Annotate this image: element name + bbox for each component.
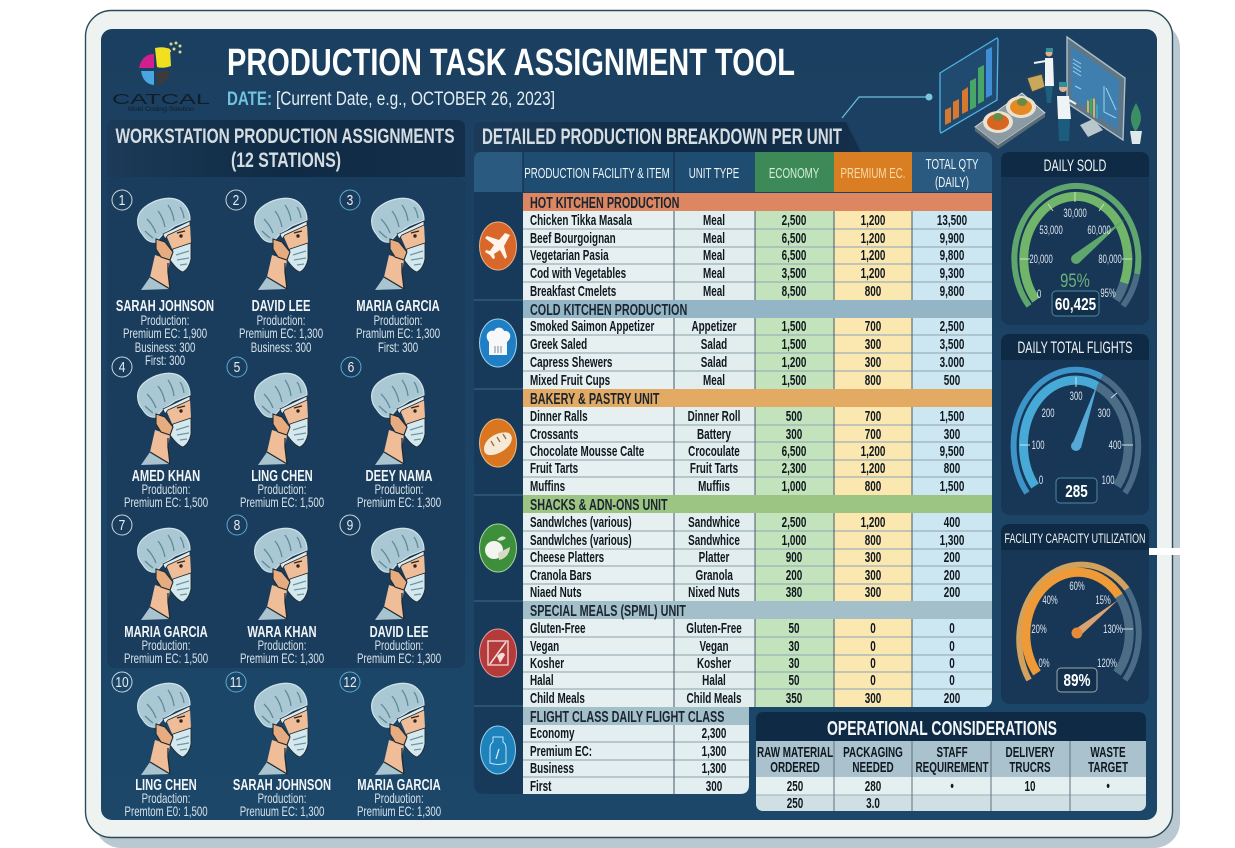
section: snacks: 300 bbox=[865, 549, 881, 566]
section: cold kitchen: Mixed Fruit Cups bbox=[530, 372, 610, 389]
section: hot kitchen: Meal bbox=[703, 230, 725, 247]
gauge: daily sold: 60,425 bbox=[1055, 295, 1096, 315]
station 1: SARAH JOHNSON bbox=[116, 296, 214, 314]
station 7 bbox=[112, 515, 209, 666]
panel: operational considerations: 250 bbox=[787, 795, 803, 812]
section: hot kitchen: 6,500 bbox=[782, 230, 806, 247]
station 3: Production: bbox=[374, 313, 422, 328]
station 1 bbox=[112, 190, 214, 368]
station 8: 8 bbox=[234, 517, 240, 533]
section: hot kitchen: HOT KITCHEN PRODUCTION bbox=[530, 194, 679, 212]
section: hot kitchen: Beef Bourgoignan bbox=[530, 230, 616, 247]
section: special meals: Halal bbox=[702, 672, 726, 689]
station 8: Production: bbox=[258, 638, 306, 653]
section: cold kitchen: 1,200 bbox=[782, 354, 806, 371]
station 4: Production: bbox=[142, 482, 190, 497]
section: cold kitchen: 2,500 bbox=[940, 318, 964, 335]
station 3 bbox=[340, 190, 441, 355]
gauge: daily sold bbox=[1001, 152, 1149, 325]
section: hot kitchen: Cod with Vegetables bbox=[530, 265, 626, 282]
section: snacks: 800 bbox=[865, 532, 881, 549]
section: special meals: 0 bbox=[949, 620, 955, 637]
header illustration bbox=[842, 37, 1142, 149]
section: snacks: Granola bbox=[696, 567, 734, 584]
section: bakery: 1,000 bbox=[782, 478, 806, 495]
station 6: DEEY NAMA bbox=[366, 466, 433, 484]
station 4 bbox=[112, 357, 209, 510]
panel: operational considerations: WASTE bbox=[1090, 744, 1126, 761]
table header row bbox=[474, 152, 992, 192]
station 4: Premium EC: 1,500 bbox=[124, 495, 209, 510]
station 2: DAVID LEE bbox=[252, 296, 310, 314]
heading: workstation production assignments: WORKSTATION PRODUCTION ASSIGNMENTS bbox=[116, 124, 454, 148]
section: bakery: 700 bbox=[865, 408, 881, 425]
section: special meals: Vegan bbox=[530, 638, 559, 655]
panel: operational considerations: NEEDED bbox=[852, 759, 894, 776]
heading: workstation production assignments: (12 STATIONS) bbox=[231, 148, 341, 172]
panel: operational considerations: TRUCRS bbox=[1009, 759, 1051, 776]
gauge: daily total flights: 300 bbox=[1098, 407, 1111, 421]
gauge: daily sold: 95% bbox=[1060, 270, 1090, 291]
station 3: Pramlum EC: 1,300 bbox=[356, 326, 441, 341]
station 10: Prodaction: bbox=[142, 791, 190, 806]
station 5: Premium EC: 1,500 bbox=[240, 495, 325, 510]
gauge: facility capacity utilization: 89% bbox=[1064, 671, 1090, 691]
section: hot kitchen: Chicken Tikka Masala bbox=[530, 212, 633, 229]
section: special meals: 0 bbox=[949, 638, 955, 655]
icon: apple bbox=[480, 524, 516, 572]
station 2: Premium EC: 1,300 bbox=[239, 326, 324, 341]
section: snacks: 200 bbox=[944, 584, 960, 601]
station 12: MARIA GARCIA bbox=[357, 775, 441, 793]
section: snacks: 200 bbox=[944, 549, 960, 566]
panel: operational considerations: 280 bbox=[865, 778, 881, 795]
panel: operational considerations bbox=[756, 712, 1146, 812]
gauge: daily sold: 0 bbox=[1037, 288, 1042, 302]
section: cold kitchen: Appetizer bbox=[691, 318, 737, 335]
logo: CATCAL bbox=[112, 91, 210, 108]
station 9 bbox=[340, 515, 442, 666]
section: bakery: 9,500 bbox=[940, 443, 964, 460]
icon: bottle bbox=[480, 726, 516, 774]
section: bakery: 300 bbox=[786, 426, 802, 443]
section: bakery bbox=[523, 389, 992, 495]
section: bakery: Chocolate Mousse Calte bbox=[530, 443, 644, 460]
section: bakery: 800 bbox=[865, 478, 881, 495]
section: special meals: 30 bbox=[788, 638, 800, 655]
section: special meals: Child Meals bbox=[530, 690, 585, 707]
section: special meals: 350 bbox=[786, 690, 802, 707]
gauge: daily total flights bbox=[1001, 334, 1149, 515]
station 2 bbox=[226, 190, 324, 355]
gauge: facility capacity utilization: 120% bbox=[1097, 657, 1117, 671]
section: special meals: Halal bbox=[530, 672, 554, 689]
section: special meals: 50 bbox=[788, 672, 800, 689]
station 7: 7 bbox=[119, 517, 125, 533]
section: snacks: Sandwlches (various) bbox=[530, 514, 632, 531]
section: snacks bbox=[523, 495, 992, 601]
station 4: AMED KHAN bbox=[132, 466, 200, 484]
section: special meals: Gluten-Free bbox=[686, 620, 742, 637]
panel: operational considerations: RAW MATERIAL bbox=[757, 744, 833, 761]
station 10: Premtom E0: 1,500 bbox=[125, 804, 208, 819]
flight class table: Premium EC: bbox=[530, 743, 592, 760]
station 1: 1 bbox=[119, 192, 125, 208]
gauge: daily sold: 95% bbox=[1100, 287, 1116, 301]
icon: special meals bbox=[480, 629, 516, 677]
section: snacks: 900 bbox=[786, 549, 802, 566]
station 3: 3 bbox=[347, 192, 353, 208]
section: bakery: 1,200 bbox=[861, 460, 885, 477]
gauge: daily sold: 53,000 bbox=[1039, 224, 1063, 238]
section: cold kitchen: Capress Shewers bbox=[530, 354, 612, 371]
section: bakery: 1,500 bbox=[940, 478, 964, 495]
station 11: 11 bbox=[230, 674, 242, 690]
section: hot kitchen: 1,200 bbox=[861, 212, 885, 229]
section: cold kitchen: Greek Saled bbox=[530, 336, 587, 353]
section: snacks: SHACKS & ADN-ONS UNIT bbox=[530, 496, 668, 514]
date line: DATE: bbox=[227, 88, 272, 110]
station 7: Production: bbox=[142, 638, 190, 653]
station 3: MARIA GARCIA bbox=[356, 296, 440, 314]
section: hot kitchen: Meal bbox=[703, 283, 725, 300]
icon: chef hat bbox=[480, 319, 516, 367]
section: hot kitchen: Vegetarian Pasia bbox=[530, 247, 609, 264]
logo bbox=[112, 42, 210, 113]
station 12: 12 bbox=[343, 674, 357, 690]
section: hot kitchen: 1,200 bbox=[861, 247, 885, 264]
station 3: First: 300 bbox=[378, 340, 419, 355]
table header row: ECONOMY bbox=[769, 165, 820, 182]
section: special meals: 0 bbox=[949, 672, 955, 689]
section: snacks: 200 bbox=[944, 567, 960, 584]
section: hot kitchen: 800 bbox=[865, 283, 881, 300]
section: hot kitchen: 9,800 bbox=[940, 283, 964, 300]
gauge: daily total flights: DAILY TOTAL FLIGHTS bbox=[1017, 338, 1133, 357]
section: cold kitchen bbox=[523, 300, 992, 389]
panel: operational considerations: TARGET bbox=[1088, 759, 1128, 776]
flight class table: 1,300 bbox=[702, 760, 726, 777]
section: hot kitchen: 13,500 bbox=[937, 212, 967, 229]
panel: operational considerations: STAFF bbox=[936, 744, 968, 761]
section: bakery: Fruit Tarts bbox=[690, 460, 738, 477]
date line bbox=[227, 88, 555, 110]
panel: workstation assignments bbox=[107, 120, 465, 819]
section: hot kitchen: Meal bbox=[703, 212, 725, 229]
section: snacks: 1,000 bbox=[782, 532, 806, 549]
station 6: Premium EC: 1,300 bbox=[357, 495, 442, 510]
section: snacks: Niaed Nuts bbox=[530, 584, 582, 601]
section: special meals: Child Meals bbox=[687, 690, 741, 707]
flight class table: 2,300 bbox=[702, 725, 726, 742]
section: snacks: 200 bbox=[786, 567, 802, 584]
flight class table: Business bbox=[530, 760, 574, 777]
section: bakery: 2,300 bbox=[782, 460, 806, 477]
gauge: daily total flights: 100 bbox=[1032, 439, 1045, 453]
section: bakery: Dinner Ralls bbox=[530, 408, 588, 425]
section: special meals: SPECIAL MEALS (SPML) UNIT bbox=[530, 602, 686, 620]
station 2: 2 bbox=[233, 192, 239, 208]
station 6: Production: bbox=[375, 482, 423, 497]
section: bakery: 800 bbox=[944, 460, 960, 477]
section: snacks: Sandwhice bbox=[688, 532, 740, 549]
panel: operational considerations: 10 bbox=[1024, 778, 1036, 795]
section: bakery: Dinner Roll bbox=[688, 408, 740, 425]
section: snacks: Cheese Platters bbox=[530, 549, 604, 566]
station 1: First: 300 bbox=[145, 353, 186, 368]
gauge: daily sold: 30,000 bbox=[1063, 207, 1087, 221]
station 9: 9 bbox=[347, 517, 353, 533]
section: hot kitchen bbox=[523, 193, 992, 300]
gauge: daily total flights: 400 bbox=[1109, 439, 1122, 453]
section: snacks: Sandwlches (various) bbox=[530, 532, 632, 549]
section: cold kitchen: 1,500 bbox=[782, 372, 806, 389]
section: hot kitchen: Meal bbox=[703, 247, 725, 264]
icon column bbox=[474, 192, 523, 794]
gauge: facility capacity utilization: 20% bbox=[1031, 623, 1047, 637]
section: cold kitchen: 500 bbox=[944, 372, 960, 389]
gauge: daily sold: 60,000 bbox=[1087, 224, 1111, 238]
section: cold kitchen: 3.000 bbox=[940, 354, 964, 371]
station 7: Premium EC: 1,500 bbox=[124, 651, 209, 666]
section: snacks: 300 bbox=[865, 567, 881, 584]
station 11 bbox=[226, 672, 331, 819]
station 8: Premium EC: 1,300 bbox=[240, 651, 325, 666]
icon: bread bbox=[480, 419, 516, 467]
panel: operational considerations: • bbox=[1106, 778, 1110, 795]
station 10 bbox=[112, 672, 208, 819]
station 12 bbox=[340, 672, 442, 819]
gauge: facility capacity utilization: 40% bbox=[1042, 594, 1058, 608]
panel: operational considerations: ORDERED bbox=[770, 759, 820, 776]
title: PRODUCTION TASK ASSIGNMENT TOOL bbox=[227, 42, 795, 84]
section: special meals: 30 bbox=[788, 655, 800, 672]
section: special meals: Kosher bbox=[697, 655, 731, 672]
gauge: daily total flights: 0 bbox=[1039, 474, 1044, 488]
table header row: TOTAL QTY bbox=[926, 156, 979, 173]
station 1: Premium EC: 1,900 bbox=[123, 326, 208, 341]
section: cold kitchen: Salad bbox=[701, 354, 727, 371]
section: hot kitchen: 1,200 bbox=[861, 265, 885, 282]
section: cold kitchen: 300 bbox=[865, 354, 881, 371]
section: hot kitchen: 9,800 bbox=[940, 247, 964, 264]
section: bakery: BAKERY & PASTRY UNIT bbox=[530, 390, 660, 408]
flight class table: Economy bbox=[530, 725, 574, 742]
station 10: LING CHEN bbox=[135, 775, 197, 793]
production table body bbox=[523, 193, 992, 707]
gauge: facility capacity utilization: FACILITY CAPACITY UTILIZATION bbox=[1004, 531, 1146, 546]
panel: operational considerations: 250 bbox=[787, 778, 803, 795]
section: special meals: 0 bbox=[949, 655, 955, 672]
gauge: daily sold: 20,000 bbox=[1029, 253, 1053, 267]
gauge: daily total flights: 200 bbox=[1042, 407, 1055, 421]
section: cold kitchen: 800 bbox=[865, 372, 881, 389]
station 12: Premium EC: 1,300 bbox=[357, 804, 442, 819]
section: special meals: Gluten-Free bbox=[530, 620, 585, 637]
section: cold kitchen: 3,500 bbox=[940, 336, 964, 353]
section: snacks: 300 bbox=[865, 584, 881, 601]
section: bakery: Fruit Tarts bbox=[530, 460, 578, 477]
section: snacks: 400 bbox=[944, 514, 960, 531]
section: snacks: 2,500 bbox=[782, 514, 806, 531]
section: special meals: 300 bbox=[865, 690, 881, 707]
section: cold kitchen: Meal bbox=[703, 372, 725, 389]
section: cold kitchen: Salad bbox=[701, 336, 727, 353]
section: snacks: 380 bbox=[786, 584, 802, 601]
section: special meals: 0 bbox=[870, 655, 876, 672]
station 7: MARIA GARCIA bbox=[124, 622, 208, 640]
gauge: facility capacity utilization: 15% bbox=[1095, 594, 1111, 608]
section: snacks: Nixed Nuts bbox=[688, 584, 740, 601]
flight class table: 1,300 bbox=[702, 743, 726, 760]
section: bakery: 1,500 bbox=[940, 408, 964, 425]
section: special meals: 50 bbox=[788, 620, 800, 637]
panel: operational considerations: • bbox=[950, 778, 954, 795]
section: bakery: Muffiıs bbox=[698, 478, 730, 495]
flight class table: FLIGHT CLASS DAILY FLIGHT CLASS bbox=[530, 708, 724, 726]
section: snacks: Sandwhice bbox=[688, 514, 740, 531]
icon: plane bbox=[480, 222, 516, 270]
station 5: LING CHEN bbox=[251, 466, 313, 484]
heading: detailed production breakdown bbox=[474, 122, 861, 152]
table header row: PREMIUM EC. bbox=[841, 165, 905, 182]
section: special meals: Kosher bbox=[530, 655, 564, 672]
section: snacks: Cranola Bars bbox=[530, 567, 592, 584]
station 2: Business: 300 bbox=[251, 340, 312, 355]
station 8 bbox=[227, 515, 325, 666]
section: cold kitchen: 1,500 bbox=[782, 336, 806, 353]
section: special meals: 200 bbox=[944, 690, 960, 707]
station 8: WARA KHAN bbox=[247, 622, 317, 640]
heading: operational considerations: OPERATIONAL CONSIDERATIONS bbox=[827, 718, 1057, 740]
date line: [Current Date, e.g., OCTOBER 26, 2023] bbox=[276, 88, 555, 110]
station 9: DAVID LEE bbox=[370, 622, 428, 640]
station 5: 5 bbox=[234, 359, 240, 375]
section: hot kitchen: Meal bbox=[703, 265, 725, 282]
heading: detailed production breakdown: DETAILED PRODUCTION BREAKDOWN PER UNIT bbox=[482, 124, 842, 149]
heading: workstation production assignments bbox=[107, 120, 465, 177]
section: bakery: Battery bbox=[697, 426, 731, 443]
gauge: facility capacity utilization: 130% bbox=[1103, 623, 1123, 637]
section: cold kitchen: 700 bbox=[865, 318, 881, 335]
station 5 bbox=[227, 357, 325, 510]
panel: operational considerations: REQUIREMENT bbox=[916, 759, 989, 776]
section: special meals bbox=[523, 601, 992, 707]
gauge: daily sold: DAILY SOLD bbox=[1044, 156, 1106, 175]
station 12: Produotion: bbox=[374, 791, 424, 806]
station 11: SARAH JOHNSON bbox=[233, 775, 331, 793]
main dashboard panel bbox=[101, 29, 1157, 820]
section: bakery: 6,500 bbox=[782, 443, 806, 460]
table header row: PRODUCTION FACILITY & ITEM bbox=[524, 165, 670, 182]
section: hot kitchen: 3,500 bbox=[782, 265, 806, 282]
flight class table: 300 bbox=[706, 778, 722, 795]
station 9: Premium EC: 1,300 bbox=[357, 651, 442, 666]
section: special meals: 0 bbox=[870, 672, 876, 689]
gauge: daily total flights: 100 bbox=[1102, 474, 1115, 488]
section: cold kitchen: 1,500 bbox=[782, 318, 806, 335]
white edge artifact bbox=[1149, 548, 1180, 555]
flight class table bbox=[523, 707, 749, 795]
gauge: facility capacity utilization: 60% bbox=[1069, 580, 1085, 594]
panel: operational considerations: 3.0 bbox=[866, 795, 880, 812]
section: bakery: Muffins bbox=[530, 478, 565, 495]
station 1: Business: 300 bbox=[135, 340, 196, 355]
section: snacks: 1,300 bbox=[940, 532, 964, 549]
section: bakery: Crossants bbox=[530, 426, 578, 443]
section: cold kitchen: COLD KITCHEN PRODUCTION bbox=[530, 301, 687, 319]
section: bakery: Crocoulate bbox=[688, 443, 740, 460]
section: cold kitchen: Smoked Saimon Appetizer bbox=[530, 318, 654, 335]
heading: operational considerations bbox=[756, 712, 1146, 741]
station 11: Production: bbox=[258, 791, 306, 806]
gauge: daily total flights: 300 bbox=[1070, 390, 1083, 404]
gauge: facility capacity utilization bbox=[1001, 524, 1149, 704]
flight class table: First bbox=[530, 778, 552, 795]
station 5: Production: bbox=[258, 482, 306, 497]
section: special meals: Vegan bbox=[699, 638, 729, 655]
section: bakery: 700 bbox=[865, 426, 881, 443]
section: hot kitchen: 9,900 bbox=[940, 230, 964, 247]
section: bakery: 1,200 bbox=[861, 443, 885, 460]
section: bakery: 300 bbox=[944, 426, 960, 443]
panel: operational considerations: DELIVERY bbox=[1006, 744, 1055, 761]
table header row: (DAILY) bbox=[935, 174, 969, 191]
gauge: daily sold: 80,000 bbox=[1098, 253, 1122, 267]
section: cold kitchen: 300 bbox=[865, 336, 881, 353]
station 6 bbox=[341, 357, 442, 510]
section: hot kitchen: 2,500 bbox=[782, 212, 806, 229]
section: snacks: 1,200 bbox=[861, 514, 885, 531]
station 11: Prenuum EC: 1,300 bbox=[240, 804, 325, 819]
section: hot kitchen: 9,300 bbox=[940, 265, 964, 282]
station 9: Production: bbox=[375, 638, 423, 653]
panel: operational considerations: PACKAGING bbox=[843, 744, 903, 761]
station 2: Production: bbox=[257, 313, 305, 328]
station 10: 10 bbox=[115, 674, 129, 690]
station 6: 6 bbox=[348, 359, 354, 375]
section: hot kitchen: 8,500 bbox=[782, 283, 806, 300]
station 1: Production: bbox=[141, 313, 189, 328]
section: hot kitchen: 6,500 bbox=[782, 247, 806, 264]
section: snacks: Platter bbox=[699, 549, 729, 566]
section: hot kitchen: 1,200 bbox=[861, 230, 885, 247]
section: bakery: 500 bbox=[786, 408, 802, 425]
gauge: facility capacity utilization: 0% bbox=[1038, 657, 1050, 671]
section: hot kitchen: Breakfast Cmelets bbox=[530, 283, 616, 300]
logo: Mold Coding Solution bbox=[128, 107, 194, 113]
station 4: 4 bbox=[119, 359, 126, 375]
table header row: UNIT TYPE bbox=[689, 165, 739, 182]
section: special meals: 0 bbox=[870, 620, 876, 637]
section: special meals: 0 bbox=[870, 638, 876, 655]
gauge: daily total flights: 285 bbox=[1065, 482, 1088, 502]
